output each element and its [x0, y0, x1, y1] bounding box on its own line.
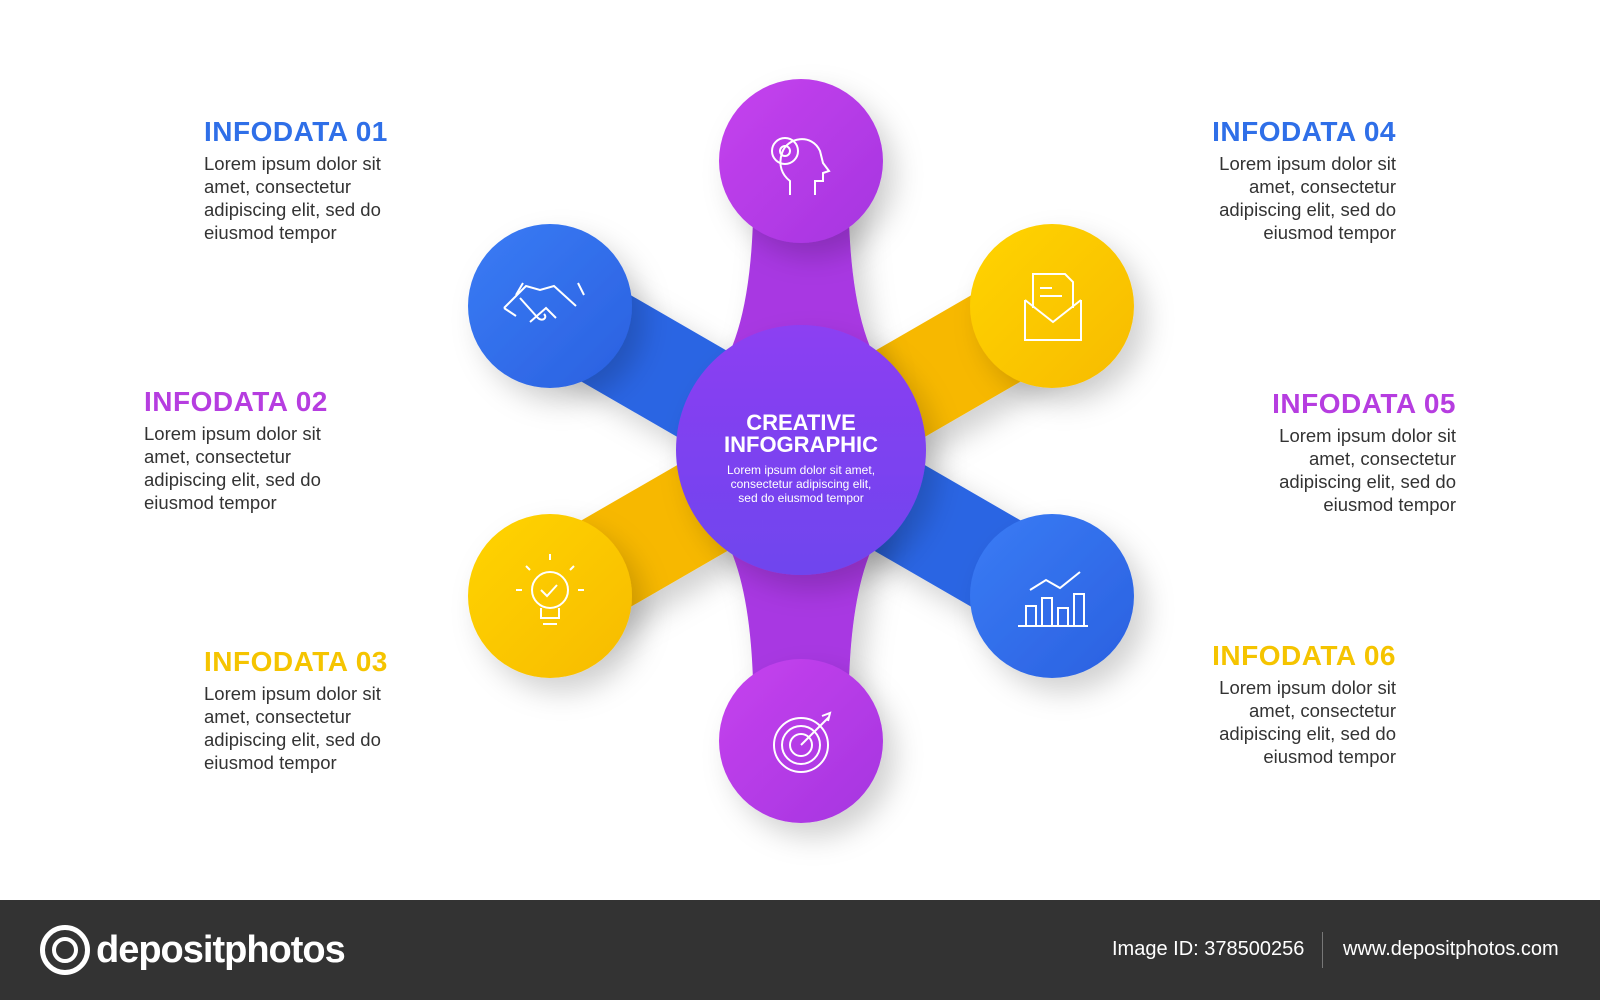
text block 01: Lorem ipsum dolor sit amet, consectetur adipiscing elit, sed do eiusmod tempor: [204, 153, 381, 243]
text block 04: [1212, 116, 1396, 243]
circle: upper-left blue: [468, 224, 632, 388]
footer logo: [40, 925, 345, 975]
center circle: [676, 325, 926, 575]
footer bar: [0, 900, 1600, 1000]
text block 03: INFODATA 03: [204, 646, 388, 677]
text block 05: INFODATA 05: [1272, 388, 1456, 419]
text block 03: [204, 646, 388, 773]
circle: upper-right yellow: [970, 224, 1134, 388]
center circle: consectetur adipiscing elit,: [731, 477, 871, 491]
text block 04: Lorem ipsum dolor sit amet, consectetur adipiscing elit, sed do eiusmod tempor: [1219, 153, 1396, 243]
icon: target: [774, 713, 830, 772]
text block 06: INFODATA 06: [1212, 640, 1396, 671]
center circle: sed do eiusmod tempor: [738, 491, 864, 505]
circle: bottom purple: [719, 659, 883, 823]
footer url: www.depositphotos.com: [1343, 938, 1559, 960]
connector: blue band: [525, 263, 1077, 639]
text block 04: INFODATA 04: [1212, 116, 1396, 147]
circle: top purple: [719, 79, 883, 243]
center text: Lorem ipsum dolor sit amet,: [727, 463, 875, 477]
text block 02: INFODATA 02: [144, 386, 328, 417]
text block 03: Lorem ipsum dolor sit amet, consectetur adipiscing elit, sed do eiusmod tempor: [204, 683, 381, 773]
text block 02: Lorem ipsum dolor sit amet, consectetur adipiscing elit, sed do eiusmod tempor: [144, 423, 321, 513]
text block 01: [204, 116, 388, 243]
text block 01: INFODATA 01: [204, 116, 388, 147]
footer image id: Image ID: 378500256: [1112, 938, 1304, 960]
icon: handshake: [504, 283, 584, 322]
text block 06: [1212, 640, 1396, 767]
center title: CREATIVE: [746, 410, 856, 435]
text block 05: Lorem ipsum dolor sit amet, consectetur adipiscing elit, sed do eiusmod tempor: [1279, 425, 1456, 515]
text block 02: [144, 386, 328, 513]
icon: head gear: [772, 138, 829, 195]
circle: lower-left yellow: [468, 514, 632, 678]
icon: bar chart: [1018, 572, 1088, 626]
center circle: INFOGRAPHIC: [724, 432, 878, 457]
circle: lower-right blue: [970, 514, 1134, 678]
connector: purple band: [726, 161, 876, 741]
text block 06: Lorem ipsum dolor sit amet, consectetur adipiscing elit, sed do eiusmod tempor: [1219, 677, 1396, 767]
icon: envelope: [1025, 274, 1081, 340]
footer logo: depositphotos: [96, 928, 345, 970]
text block 05: [1272, 388, 1456, 515]
connector: yellow band: [525, 263, 1077, 639]
icon: lightbulb: [516, 554, 584, 624]
